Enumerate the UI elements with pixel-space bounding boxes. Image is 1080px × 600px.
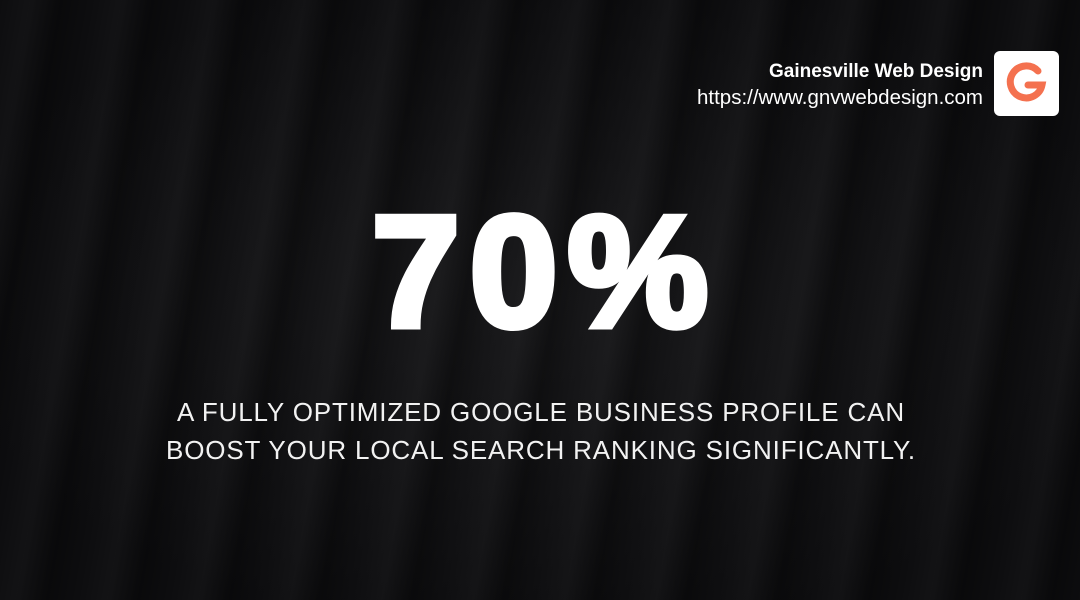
subtitle: [166, 397, 916, 465]
brand text: https://www.gnvwebdesign.com: [697, 86, 983, 109]
icon: logo: [994, 51, 1059, 116]
subtitle: A FULLY OPTIMIZED GOOGLE BUSINESS PROFILE CAN: [177, 397, 905, 427]
subtitle: BOOST YOUR LOCAL SEARCH RANKING SIGNIFICANTLY.: [166, 435, 916, 465]
brand text: [697, 61, 983, 109]
brand text: Gainesville Web Design: [769, 61, 983, 82]
headline stat: 70%: [372, 184, 718, 360]
